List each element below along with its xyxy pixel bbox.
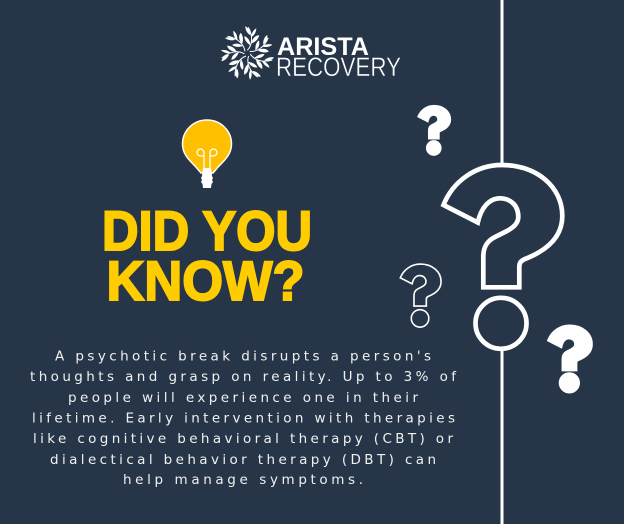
body text: dialectical behavior therapy (DBT) can [50, 452, 436, 468]
title line 2: KNOW? [106, 249, 304, 312]
body text: A psychotic break disrupts a person's [55, 348, 431, 364]
icon: light bulb [182, 120, 232, 188]
logo wordmark bottom: RECOVERY [276, 52, 401, 82]
icon: small outlined question mark [400, 264, 441, 327]
logo wordmark top: ARISTA [277, 33, 369, 61]
title [102, 199, 312, 312]
logo: Arista Recovery [218, 26, 401, 83]
body text: thoughts and grasp on reality. Up to 3% of [30, 369, 457, 385]
body text: help manage symptoms. [123, 472, 363, 488]
icon: large outlined question mark [444, 165, 562, 349]
icon: solid question mark top [418, 106, 450, 155]
body text: like cognitive behavioral therapy (CBT) or [33, 431, 453, 447]
vertical divider line [500, 0, 504, 524]
body text: people will experience one in their [68, 390, 418, 406]
icon: solid question mark bottom [549, 326, 591, 392]
body text [30, 348, 457, 488]
body text: lifetime. Early intervention with therapies [32, 410, 455, 426]
title line 1: DID YOU [102, 199, 312, 262]
icon: leaf wreath [218, 26, 276, 83]
